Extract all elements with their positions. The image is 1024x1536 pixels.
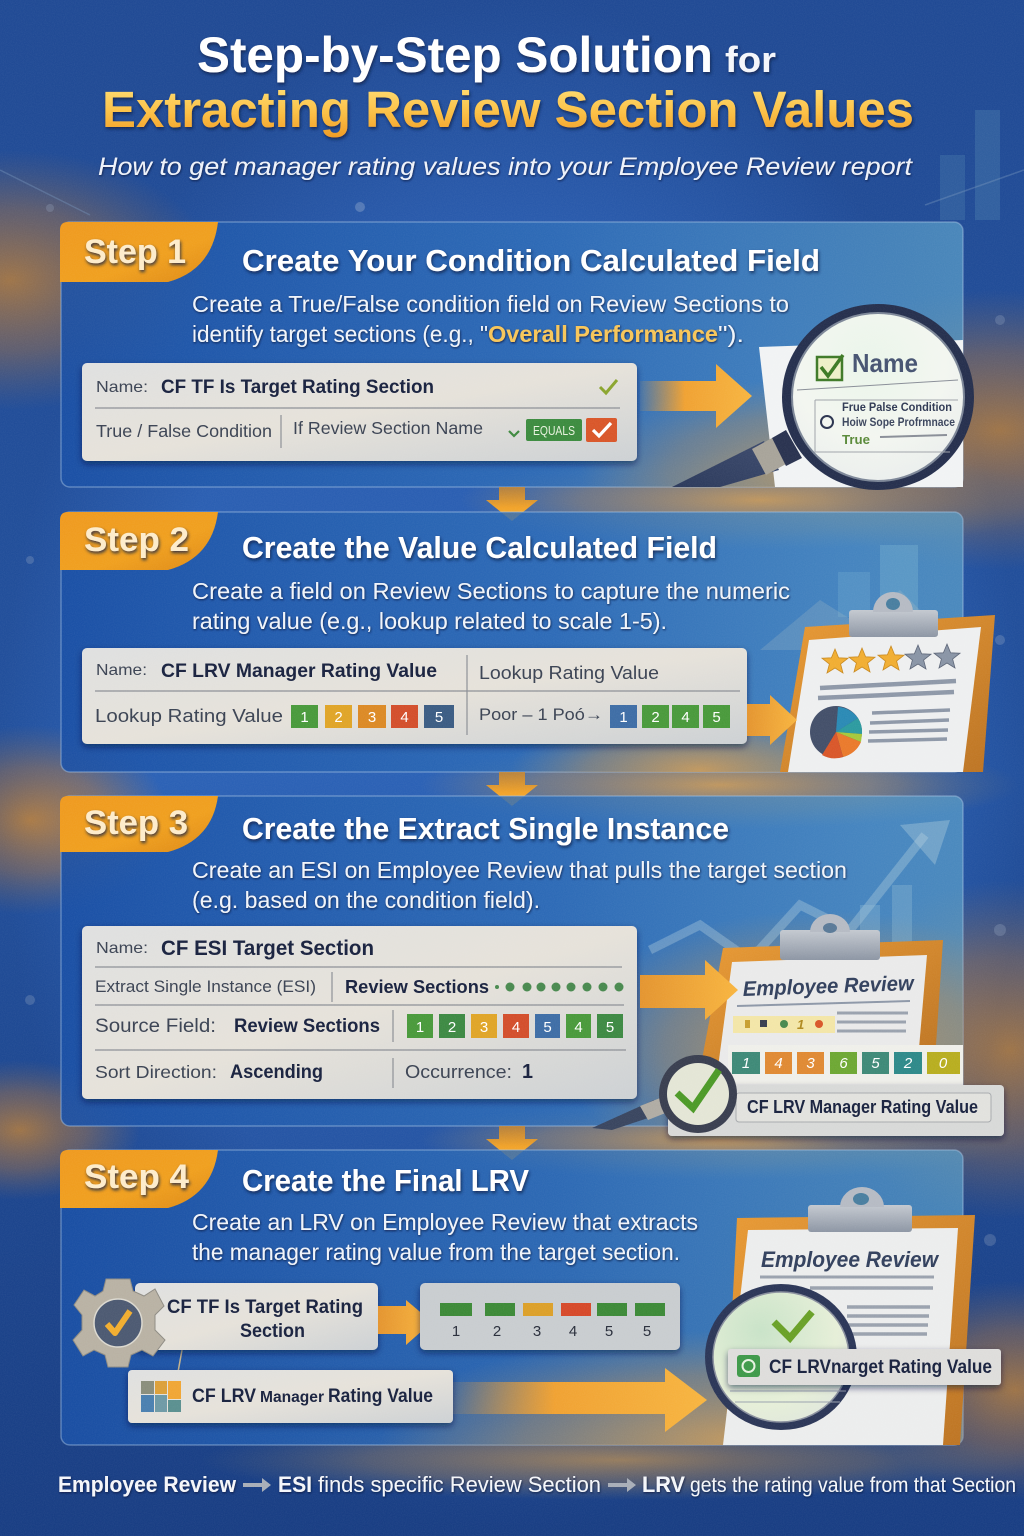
rating scale boxes left: 1	[300, 709, 309, 726]
step 3 form card: 1	[522, 1061, 533, 1083]
icon: grid	[141, 1381, 181, 1412]
icon: document with magnifier: Frue Palse Condition	[842, 400, 952, 414]
rating scale boxes	[407, 1014, 623, 1038]
step 1 form card: If Review Section Name	[293, 418, 483, 438]
step 3 form card: Ascending	[230, 1062, 323, 1083]
step 3 form card: Review Sections	[345, 977, 489, 997]
small status strip	[733, 1016, 835, 1033]
icon: employee review clipboard with magnifier	[705, 1187, 1001, 1445]
rating scale boxes: 2	[448, 1019, 456, 1036]
card: CF LRV	[128, 1370, 453, 1423]
step 4 description: Create an LRV on Employee Review that extracts	[192, 1209, 698, 1235]
icon: gear with check	[73, 1279, 165, 1367]
step 1 form card: Name:	[96, 379, 148, 396]
arrow: step 4	[453, 1368, 707, 1432]
step 1 tab	[60, 222, 218, 282]
step 3 form card: Sort Direction:	[95, 1062, 217, 1082]
panel: step 1	[60, 221, 974, 490]
step 2 tab: Step 2	[84, 521, 189, 559]
result card: CF LRV Manager Rating Value	[747, 1097, 978, 1117]
card: rating bars	[420, 1283, 680, 1350]
title: Extracting Review Section Values	[102, 81, 914, 138]
step 3 form card: Name:	[96, 940, 148, 957]
icon: employee review clipboard with magnifier: Employee Review	[761, 1247, 940, 1272]
icon: document with magnifier	[672, 304, 974, 490]
rating scale boxes right	[610, 705, 730, 728]
step 4 description: the manager rating value from the target section.	[192, 1239, 680, 1265]
icon: document with magnifier: True	[842, 432, 870, 447]
rating value boxes: 1	[742, 1055, 750, 1072]
step 2 form card	[82, 648, 747, 744]
step 1 description	[192, 291, 789, 347]
card: CF LRV: Rating Value	[328, 1386, 433, 1407]
flow arrow 1	[243, 1478, 271, 1492]
footer flow: LRV	[642, 1472, 685, 1497]
card: CF TF	[135, 1283, 378, 1350]
rating scale boxes left: 2	[334, 709, 343, 726]
icon: employee review clipboard	[592, 914, 1004, 1136]
step 1 description: Overall Performance	[488, 321, 718, 347]
step 2 description	[192, 578, 790, 634]
rating scale boxes right: 2	[651, 709, 660, 726]
rating scale boxes left	[291, 705, 454, 728]
rating scale boxes: 5	[543, 1019, 552, 1036]
step 3 tab: Step 3	[84, 804, 188, 842]
rating value boxes: 0	[939, 1055, 948, 1072]
arrow: step 3	[640, 960, 738, 1020]
footer flow: Employee Review	[58, 1472, 237, 1497]
step 3 form card: Review Sections	[234, 1016, 380, 1037]
rating scale boxes: 3	[480, 1019, 488, 1036]
icon: document with magnifier: Hoiw Sope Profrmnace	[842, 415, 955, 429]
step 4 tab: Step 4	[84, 1158, 189, 1196]
panel: step 3	[60, 795, 1008, 1144]
flow arrow 2	[608, 1478, 636, 1492]
rating value boxes: 3	[806, 1055, 815, 1072]
panel: step 2	[60, 511, 995, 773]
label card	[728, 1349, 1001, 1385]
step 2 form card: Lookup Rating Value	[95, 706, 283, 726]
step 4 heading: Create the Final LRV	[242, 1163, 529, 1198]
step 2 heading: Create the Value Calculated Field	[242, 530, 717, 565]
card: rating bars: 3	[533, 1323, 541, 1340]
step 1 heading: Create Your Condition Calculated Field	[242, 243, 820, 278]
card: rating bars: 4	[569, 1323, 577, 1340]
step 3 form card: Extract Single Instance (ESI)	[95, 977, 316, 996]
rating scale boxes left: 5	[435, 709, 443, 726]
rating value boxes	[732, 1052, 960, 1074]
arrow: to rating bars	[378, 1300, 432, 1345]
footer flow	[58, 1472, 1016, 1497]
label card: CF LRVnarget Rating Value	[769, 1357, 992, 1378]
card: rating bars: 5	[643, 1323, 651, 1340]
small status strip: 1	[797, 1017, 804, 1032]
rating scale boxes right: 1	[619, 709, 628, 726]
title: for	[725, 39, 776, 80]
card: CF LRV: CF LRV	[192, 1386, 256, 1407]
step 3 form card: Source Field:	[95, 1016, 216, 1037]
step 3 form card	[82, 926, 637, 1099]
step 2 form card: CF LRV Manager Rating Value	[161, 661, 437, 682]
card: rating bars: 1	[452, 1323, 460, 1340]
step 1 tab: Step 1	[84, 233, 186, 271]
rating scale boxes right: 4	[681, 709, 690, 726]
step 3 heading: Create the Extract Single Instance	[242, 811, 729, 846]
rating scale boxes left: 3	[368, 709, 376, 726]
arrow: step 2 to step 3	[486, 772, 538, 806]
step 3 description: Create an ESI on Employee Review that pulls the target section	[192, 857, 847, 883]
pie chart	[810, 706, 862, 758]
title	[102, 27, 914, 138]
arrow: step 1	[640, 364, 752, 428]
rating scale boxes right: 5	[712, 709, 721, 726]
step 1 form card: CF TF Is Target Rating Section	[161, 377, 434, 398]
step 1 description: Create a True/False condition field on Review Sections to	[192, 291, 789, 317]
step 1 description: ").	[718, 321, 744, 347]
step 1 description: identify target sections (e.g., "	[192, 321, 488, 347]
status dots	[495, 982, 624, 992]
arrow: step 3 to step 4	[486, 1126, 538, 1160]
rating value boxes: 6	[839, 1055, 848, 1072]
step 3 form card: CF ESI Target Section	[161, 937, 374, 960]
card: rating bars: 2	[493, 1323, 501, 1340]
step 2 form card: Lookup Rating Value	[479, 663, 659, 683]
arrow: step 2	[747, 695, 797, 745]
step 3 form card: Occurrence:	[405, 1062, 512, 1082]
title: Step-by-Step Solution	[197, 27, 713, 83]
arrow: step 1 to step 2	[486, 487, 538, 521]
step 3 tab	[60, 796, 218, 852]
rating value boxes: 4	[774, 1055, 783, 1072]
step 1 form card: EQUALS	[533, 424, 575, 438]
card: CF TF: Section	[240, 1321, 305, 1342]
step 2 description: rating value (e.g., lookup related to scale 1-5).	[192, 608, 667, 634]
step 4 description	[192, 1209, 698, 1265]
rating value boxes: 5	[871, 1055, 880, 1072]
icon: clipboard with stars and pie chart	[780, 592, 995, 772]
subtitle: How to get manager rating values into your Employee Review report	[98, 153, 913, 181]
result card	[668, 1085, 1004, 1136]
rating value boxes: 2	[903, 1055, 913, 1072]
step 2 tab	[60, 512, 218, 570]
card: CF TF: CF TF Is Target Rating	[167, 1297, 363, 1318]
rating scale boxes: 5	[606, 1019, 614, 1036]
rating scale boxes left: 4	[400, 709, 409, 726]
card: CF LRV: Manager	[260, 1389, 324, 1406]
mini magnifier	[592, 1055, 737, 1133]
rating scale boxes: 4	[574, 1019, 583, 1036]
icon: document with magnifier: Name	[852, 348, 918, 378]
panel: step 4	[60, 1149, 1005, 1446]
footer flow: ESI	[278, 1472, 312, 1497]
step 2 form card: Name:	[96, 662, 147, 679]
card: rating bars: 5	[605, 1323, 613, 1340]
step 2 form card: Poor – 1 Poó→	[479, 705, 603, 724]
step 1 form card: True / False Condition	[96, 421, 272, 441]
footer flow: finds specific Review Section	[318, 1472, 601, 1497]
step 3 description	[192, 857, 847, 913]
step 1 form card	[82, 363, 637, 461]
step 3 description: (e.g. based on the condition field).	[192, 887, 540, 913]
step 2 description: Create a field on Review Sections to capture the numeric	[192, 578, 790, 604]
icon: employee review clipboard: Employee Review	[742, 972, 916, 1001]
rating scale boxes: 4	[512, 1019, 520, 1036]
step 4 tab	[60, 1150, 218, 1208]
rating scale boxes: 1	[416, 1019, 424, 1036]
